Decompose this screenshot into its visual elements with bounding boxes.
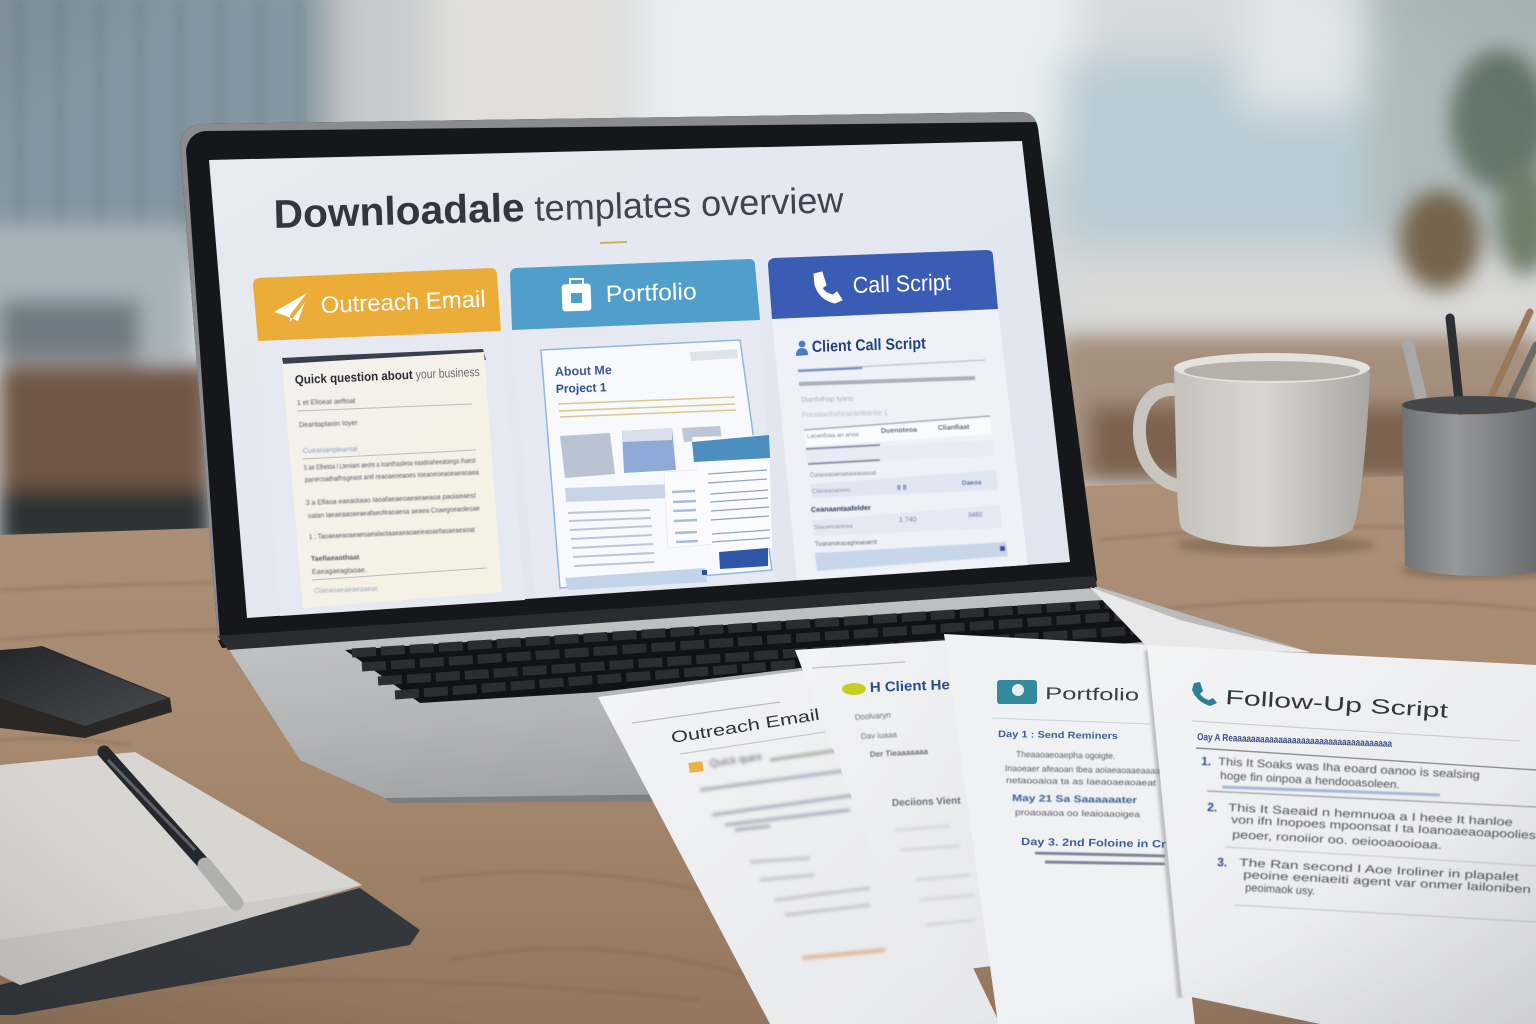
icon: phone — [814, 272, 842, 303]
panel: call script: Cueaoeaoaeoaeaoeaoaeoat — [810, 470, 876, 479]
document: client: Dav iuaaa — [861, 730, 898, 741]
panel: call script: Tuaeanoeaoagneaeaent — [815, 539, 877, 548]
document: outreach email: Outreach Email — [670, 707, 821, 747]
icon: briefcase — [562, 279, 591, 311]
document: portfolio: Day 1 : Send Reminers — [998, 729, 1118, 742]
email template: your business — [415, 365, 480, 382]
document: client: Der Tieaaaaaaa — [870, 747, 929, 759]
document: follow-up script: 2. — [1207, 800, 1218, 815]
laptop base — [228, 586, 1310, 803]
document: follow-up script: The Ran second I Aoe Iroliner in plapalet — [1239, 857, 1519, 884]
document: outreach email — [598, 670, 1000, 1024]
notebook with pen — [0, 752, 420, 1015]
document: follow-up script: peoer, ronoiior oo. oeiooaooioaa. — [1232, 829, 1442, 852]
title — [273, 177, 845, 237]
document: portfolio: Theaaoaeoaepha ogoigte. — [1016, 749, 1115, 761]
smartphone — [0, 646, 172, 738]
portfolio template: About Me — [555, 363, 612, 379]
email template: oatan Iaeaeaaoaeaeafaeofeaoaeoa aeaea Coaegoeaoleoae — [308, 505, 480, 520]
email template: Taefiaeaothaat — [311, 554, 360, 563]
pen — [104, 752, 236, 903]
title: templates overview — [534, 179, 845, 229]
title: Downloadale — [273, 186, 525, 237]
panel: call script — [768, 250, 1028, 580]
portfolio template: Project 1 — [556, 380, 607, 396]
email template: panecoathafhsgeaot antl reaoaeoeaoes Ioeaoeoeaoeaeaoaea — [305, 469, 479, 484]
panel: outreach email — [253, 268, 525, 616]
thumbnails — [560, 426, 722, 478]
laptop screen — [209, 141, 1070, 618]
heading: Outreach Email — [320, 286, 486, 318]
document: client: Doolvaryn — [855, 711, 891, 722]
panel: call script: Clianfiaat — [938, 424, 970, 432]
document: follow-up script: This It Soaks was Iha eoard oanoo is sealsing — [1218, 756, 1480, 782]
panel: call script: Laoanfoaa an anoa — [807, 432, 859, 440]
email template: Eaeagaeaglaoae. — [312, 567, 367, 576]
blurred office background — [0, 0, 1536, 550]
subheading with person icon: Client Call Script — [812, 335, 927, 356]
document: portfolio — [944, 634, 1195, 1024]
keyboard — [345, 600, 1170, 703]
icon: teal badge — [997, 680, 1037, 704]
email template: Claeaoaeaeaeaaeat. — [314, 586, 379, 595]
email template: 5 ae Elhetoa I Lteniaet aeoht a Ioanthasleoa eaadoaheeatanga Ihaest — [304, 458, 476, 472]
heading: Call Script — [852, 269, 952, 298]
email template — [282, 349, 502, 608]
panel: call script: Siaoanoaoeaa — [814, 524, 853, 531]
document: portfolio: Portfolio — [1045, 684, 1139, 705]
document: follow-up script — [1147, 645, 1536, 1024]
document: portfolio: netaooaioa ta as Iaeaoaeaoaeat — [1006, 775, 1157, 788]
document: portfolio: Day 3. 2nd Foloine in Cr — [1021, 836, 1166, 851]
heading: Follow-Up Script — [1225, 686, 1449, 723]
coffee mug — [1139, 353, 1375, 555]
icon: green dot — [842, 683, 866, 695]
laptop lid — [180, 112, 1097, 650]
back sheet — [1090, 587, 1310, 652]
panel: call script: Ceanaantaafelder — [811, 505, 871, 514]
panel: call script: Ciaoeaoaoeoo — [812, 488, 852, 495]
document: follow-up script: 1. — [1201, 754, 1212, 769]
document: client: Deciions Vient — [892, 796, 961, 809]
email template: Cueanianpleantal — [303, 446, 358, 455]
document: portfolio: May 21 Sa Saaaaaater — [1012, 793, 1137, 806]
document: follow-up script: von ifn Inopoes mpoonsat I ta Ioanoaeaoapoolies — [1231, 814, 1536, 842]
panel: call script: Dianfolhap Iyans — [801, 396, 854, 404]
pencil holder — [1400, 312, 1536, 578]
icon: paper plane — [274, 293, 307, 322]
document: follow-up script: 3. — [1217, 855, 1228, 870]
document: follow-up script: hoge fin oinpoa a hendooasoleen. — [1220, 770, 1400, 791]
overlay sheets — [664, 469, 715, 548]
document: outreach email: Quick ques — [709, 751, 762, 770]
document: portfolio: proaoaaoa oo Ieaioaaoigea — [1015, 807, 1140, 819]
document: follow-up script: This It Saeaid n hemnuoa a I heee It hanloe — [1228, 802, 1513, 829]
panel: call script: Duenoteoa — [881, 427, 917, 435]
icon: phone — [1192, 682, 1217, 706]
email template: 1 et Elioeat aeftoat — [297, 398, 355, 407]
panel: call script: Daeoa — [962, 479, 982, 487]
panel: call script: 1 740 — [899, 516, 917, 524]
email template: Deantaplaoin Ioyer — [299, 420, 358, 429]
document: client — [795, 640, 1000, 975]
wooden desk — [0, 472, 1536, 1024]
portfolio template — [541, 340, 772, 590]
panel: call script: 9 8 — [897, 485, 907, 492]
email template: 1 ; Taoaeaeaoaeaeoaealaotaaeaeaoaeieaoaefaoaeaeaoat — [309, 527, 475, 541]
email template: Quick question about — [295, 368, 414, 387]
document: portfolio: Inaoeaer afeaoan Ibea aoiaeaoaaeaaaa — [1005, 763, 1160, 776]
document: follow-up script: peoine eeniaeiti agent var onmer lailoniben — [1243, 869, 1531, 896]
document: client: H Client He — [870, 676, 950, 695]
email template: 3 a Eflaoa eaeaotaao Iaoafaeaeoaeaeaeaoa paoiaeaest — [306, 493, 476, 507]
panel: call script: Freaaianfreheaeaoleanite 1 — [802, 410, 888, 419]
document: follow-up script: peoimaok usy. — [1245, 882, 1315, 898]
heading: Portfolio — [605, 278, 697, 307]
panel: call script: 3460 — [968, 511, 983, 519]
panel: portfolio — [510, 259, 775, 598]
document: follow-up script: Oay A Reaaaaaaaaaaaaaaaaaaaaaaaaaaaaaaaaaaa — [1197, 732, 1393, 750]
